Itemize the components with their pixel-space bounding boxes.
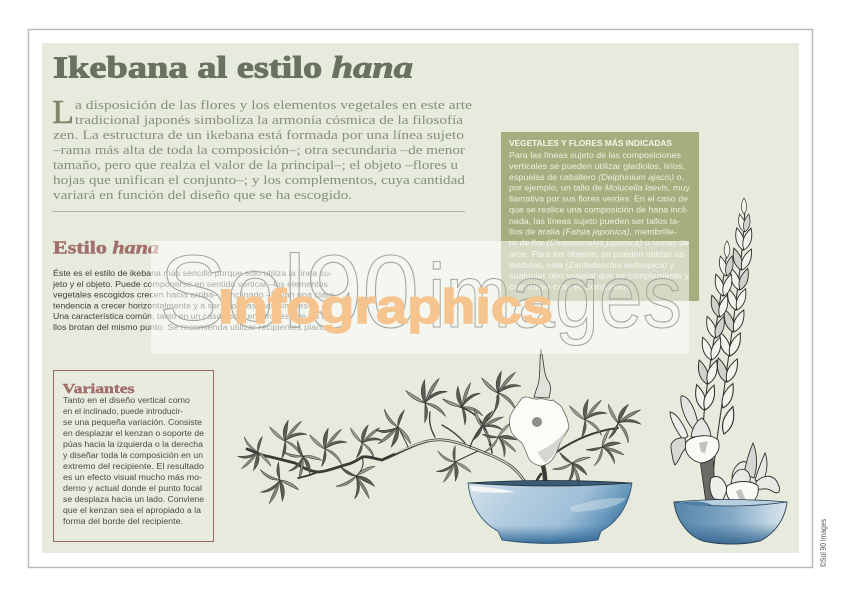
- branches: [247, 396, 618, 487]
- intro text: tradicional japonés simboliza la armonía cósmica de la filosofía: [75, 112, 463, 127]
- heading: Variantes: Variantes: [62, 382, 135, 397]
- text: Variantes: y diseñar toda la composición en un: [63, 451, 203, 460]
- copyright: ©Sol 90 Images: [819, 519, 828, 567]
- intro text: [52, 94, 472, 202]
- title: Ikebana al estilo hana: [53, 50, 413, 84]
- intro text: hojas que unifican el conjunto–; y los complementos, cuya cantidad: [53, 172, 466, 187]
- flower bud spike: [534, 349, 551, 398]
- text: vegetales y flores: cualquier otro vegetal que se complemente y: [509, 272, 689, 280]
- background panel: [42, 43, 799, 553]
- text: Variantes: en el inclinado, puede introducir-: [63, 407, 183, 416]
- text: Variantes: púas hacia la izquierda o la derecha: [63, 440, 204, 449]
- intro text: tamaño, pero que realza el valor de la principal–; el objeto –flores u: [53, 157, 459, 172]
- text: Estilo hana: llos brotan del mismo punto. Se recomienda utilizar recipientes planos.: [53, 323, 333, 332]
- text: vegetales y flores: verticales se pueden utilizar gladiolos, lirios,: [509, 162, 685, 171]
- text: Variantes: extremo del recipiente. El resultado: [63, 462, 205, 471]
- heading: Estilo hana: Estilo hana: [53, 238, 159, 258]
- illustration: vertical ikebana: [670, 198, 787, 544]
- panel: vegetales y flores: [501, 132, 699, 301]
- text: vegetales y flores: que se realice una composición de hana incli-: [509, 206, 689, 214]
- text: Estilo hana: jeto y el objeto. Puede componerse en sentido vertical –los elementos: [52, 280, 328, 289]
- text: vegetales y flores: espuelas de caballero (Delphinium ajacis) o,: [509, 173, 684, 182]
- text: Estilo hana: vegetales escogidos crecen hacia arriba– o inclinado –llevan una clara: [53, 290, 335, 300]
- text: vegetales y flores: [509, 151, 690, 292]
- drop cap: L: [52, 94, 74, 131]
- text: Estilo hana: Éste es el estilo de ikebana más sencillo porque sólo utiliza la línea su-: [53, 269, 332, 278]
- text: vegetales y flores: arce. Para los objetos, se pueden utilizar ca-: [509, 250, 687, 259]
- iris flower upper: [670, 396, 719, 465]
- watermark outline text: images: images: [428, 247, 682, 347]
- watermark orange text: Infographics: [218, 281, 553, 334]
- text: Estilo hana: Una característica común, tanto en un caso como en otro, es que los ta-: [53, 312, 332, 321]
- text: vegetales y flores: nada, las líneas sujeto pueden ser tallos ta-: [509, 217, 680, 226]
- text: Variantes: que el kenzan sea el apropiado a la: [63, 506, 202, 515]
- leaves of second stalk: [693, 241, 735, 411]
- intro text: a disposición de las flores y los elementos vegetales en este arte: [75, 97, 472, 112]
- intro text: zen. La estructura de un ikebana está formada por una línea sujeto: [53, 127, 464, 142]
- panel: Variantes: [54, 370, 214, 542]
- leaves: [236, 371, 646, 506]
- text: Variantes: Tanto en el diseño vertical como: [63, 396, 191, 405]
- text: Variantes: es un efecto visual mucho más mo-: [63, 473, 202, 482]
- iris flower lower: [710, 443, 780, 506]
- text: Estilo hana: tendencia a crecer horizontalmente y a ser informas más simples–.: [53, 302, 315, 310]
- leaves of main stalk: [714, 198, 755, 435]
- intro text: –rama más alta de toda la composición–; otra secundaria –de menor: [52, 142, 466, 157]
- text: vegetales y flores: léndulas, cala (Zantedeschia aethiopica) y: [509, 261, 674, 270]
- text: vegetales y flores: ro de flor (Chaenomeles japonica) o ramas de: [509, 238, 690, 248]
- watermark outline text: Sol90: Sol90: [159, 234, 419, 349]
- text: Variantes: [63, 396, 205, 526]
- text: Variantes: forma del borde del recipiente.: [63, 517, 183, 526]
- intro text: variará en función del diseño que se ha escogido.: [53, 187, 352, 202]
- heading: vegetales y flores: VEGETALES Y FLORES MÁS INDICADAS: [509, 139, 673, 148]
- text: vegetales y flores: llamativa por sus flores verdes. En el caso de: [509, 194, 689, 204]
- text: Variantes: se una pequeña variación. Consiste: [63, 418, 203, 427]
- white flower: [509, 397, 569, 466]
- blue bowl: [468, 480, 632, 544]
- text: Variantes: en desplazar el kenzan o soporte de: [63, 429, 205, 438]
- stems: [711, 200, 745, 500]
- text: vegetales y flores: por ejemplo, un tallo de Molucella laevis, muy: [509, 184, 690, 192]
- illustration: inclined ikebana: [236, 349, 646, 544]
- text: Variantes: derno y actual donde el punto focal: [63, 484, 202, 493]
- watermark: [151, 234, 689, 354]
- text: Estilo hana: [52, 269, 335, 332]
- text: Variantes: se desplaza hacia un lado. Conviene: [63, 495, 205, 504]
- blue bowl: [674, 500, 787, 544]
- text: vegetales y flores: llos de aralia (Fatsia japonica), membrille-: [509, 228, 677, 236]
- text: vegetales y flores: Para las líneas sujeto de las composiciones: [509, 151, 681, 160]
- text: vegetales y flores: combine con el conjunto.: [509, 282, 629, 292]
